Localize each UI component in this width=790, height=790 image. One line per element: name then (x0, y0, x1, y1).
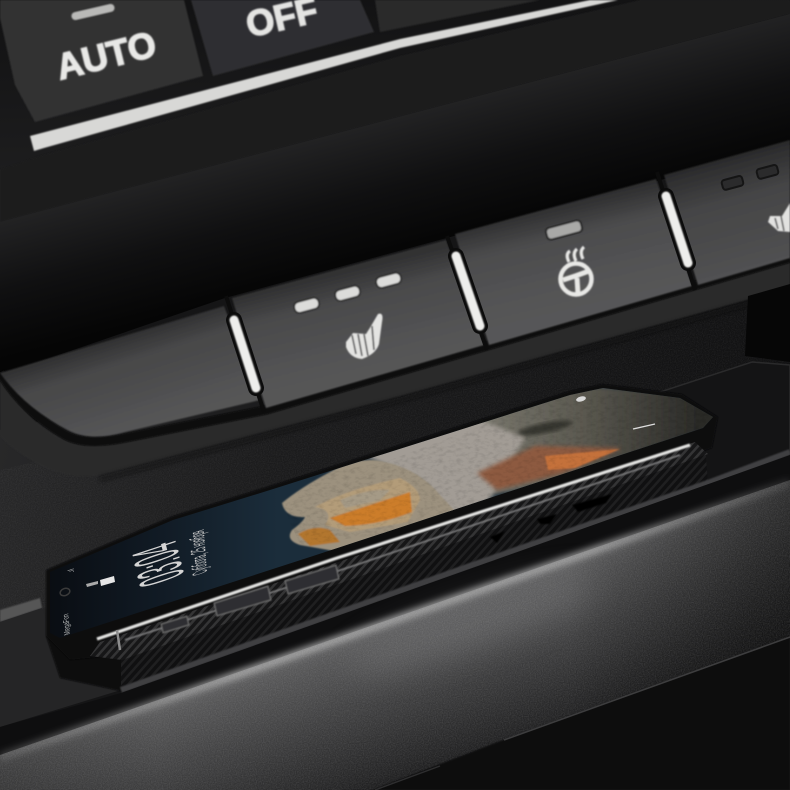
lower grey textured panel (0, 470, 790, 790)
button: heated steering wheel (455, 179, 692, 345)
left light ledge (0, 598, 42, 622)
ridge highlight (0, 482, 790, 757)
screen top reflections (576, 396, 586, 402)
icon: steering wheel (560, 247, 592, 294)
row of heater buttons (0, 140, 790, 441)
pocket behind the phone (0, 310, 783, 622)
button: right seat heat (664, 140, 790, 285)
wallpaper: pale foam (366, 421, 526, 512)
wallpaper: red rock (477, 446, 622, 490)
lock icon (86, 576, 115, 587)
pocket grain (0, 308, 790, 608)
wallpaper: marbled blob (282, 460, 456, 552)
lock screen date: Суббота, 25 ноября (187, 527, 212, 578)
wallpaper texture (290, 404, 613, 544)
carbon tray under the phone (121, 445, 708, 687)
speckle grain (0, 470, 790, 790)
carrier label: MegaFon (61, 612, 72, 636)
dark lower vent (373, 637, 790, 790)
wallpaper: grey rock top (460, 385, 720, 497)
embossed marks on tray (490, 494, 612, 543)
panel fade at ends (0, 480, 790, 790)
recess at right (745, 284, 790, 362)
indicator light (545, 220, 583, 240)
wallpaper: orange streak (545, 449, 620, 470)
button: AUTO: AUTO (52, 23, 160, 88)
smartphone (40, 384, 720, 660)
lower left body under ledge (0, 608, 121, 727)
tray lip light band (121, 452, 790, 690)
button: AUTO (0, 0, 203, 122)
recessed band above seat heater buttons (0, 14, 790, 375)
button: blank left (0, 306, 260, 437)
side buttons (161, 565, 339, 633)
carbon side frame (90, 442, 708, 660)
lip shadow (100, 292, 790, 479)
chrome strip (30, 0, 618, 151)
trim lip beneath buttons (0, 258, 790, 476)
dark gap behind buttons (0, 258, 790, 441)
phone body (46, 384, 718, 660)
phone screen (40, 385, 720, 645)
phone tray right section (660, 362, 790, 483)
black tray corner under phone (46, 636, 125, 692)
upper climate control panel (0, 0, 790, 225)
bright patch (340, 562, 600, 688)
chrome ring (117, 630, 120, 650)
icon: right seat (768, 203, 790, 232)
chrome edge highlight (97, 445, 690, 639)
dark upper fascia (0, 0, 790, 222)
indicator lights (293, 272, 402, 314)
lock screen clock: 03:04 (120, 534, 198, 593)
button: third climate key (375, 0, 540, 32)
button: OFF (191, 0, 374, 76)
icon: heated seat (346, 314, 382, 359)
button gaps and white separators (226, 172, 695, 412)
torch button (60, 588, 70, 596)
wallpaper: dark crater (517, 418, 573, 438)
dark valley before the panel (0, 455, 790, 755)
lower chrome line (125, 455, 680, 640)
status icons: .ıl (67, 567, 76, 574)
button: seat heat (232, 240, 484, 408)
